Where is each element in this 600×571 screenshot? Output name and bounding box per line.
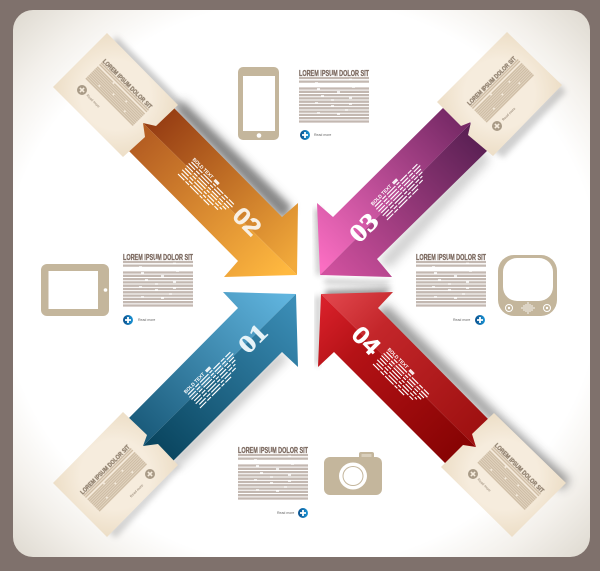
arrow 04 heading: BOLD TEXT: [386, 347, 409, 370]
number 01: 01: [233, 319, 273, 359]
arrow 03 magenta: [317, 104, 490, 277]
read more: tv: Read more: [453, 318, 470, 322]
arrow 02 lower face: [125, 123, 297, 277]
arrow 04 upper face: [321, 292, 492, 447]
text block: phone: LOREM IPSUM DOLOR SIT: [299, 69, 369, 78]
icon: tablet: [41, 264, 109, 316]
read more: camera: [277, 508, 308, 518]
arrow 02 heading: BOLD TEXT: [191, 157, 214, 180]
card 02 button: Read more: [86, 94, 101, 109]
arrow 04 red: [318, 292, 492, 467]
card 03 top right: [437, 32, 562, 156]
text block: tv: [416, 253, 486, 306]
arrow 01 label: [183, 347, 244, 408]
arrow 03 heading: BOLD TEXT: [370, 184, 393, 207]
card 02 text: LOREM IPSUM DOLOR SIT: [101, 59, 153, 111]
arrow 02 upper face: [143, 104, 298, 275]
read more: tablet: [123, 315, 155, 325]
arrow 01 lower face: [143, 294, 298, 465]
card 04 button: Read more: [477, 478, 492, 493]
text block: tablet: [123, 253, 193, 306]
text block: tv: LOREM IPSUM DOLOR SIT: [416, 253, 486, 262]
arrow 04 body text lines: [373, 348, 433, 408]
read more: tablet: Read more: [138, 318, 155, 322]
number 04: 04: [346, 321, 386, 361]
arrow and card shadows: [108, 36, 570, 538]
arrow 04 label: [373, 347, 434, 408]
arrow 02 body text lines: [178, 158, 238, 218]
card 01 button: Read more: [129, 483, 144, 498]
text block: tablet: LOREM IPSUM DOLOR SIT: [123, 253, 193, 262]
text block: camera: LOREM IPSUM DOLOR SIT: [238, 446, 308, 455]
arrow 01 body text lines: [184, 348, 244, 408]
arrow 03 left face: [317, 104, 471, 275]
card 02 top left: [53, 33, 178, 157]
text block: phone: [299, 69, 369, 122]
read more: phone: [300, 130, 331, 140]
text block: camera: [238, 446, 308, 498]
read more: phone: Read more: [314, 133, 331, 137]
icon: camera: [324, 452, 382, 495]
number 02: 02: [227, 202, 266, 242]
arrow 02 orange: [125, 104, 298, 277]
read more: tv: [453, 315, 485, 325]
arrow 01 upper face: [124, 292, 296, 446]
arrow 01 heading: BOLD TEXT: [183, 372, 206, 395]
arrow 04 lower face: [318, 294, 476, 467]
icon: smartphone: [238, 67, 279, 140]
number 03: 03: [344, 208, 384, 248]
arrow 03 label: [370, 159, 431, 220]
card 04 text: LOREM IPSUM DOLOR SIT: [493, 443, 545, 495]
card 04 bottom right: [441, 413, 566, 537]
card 03 text: LOREM IPSUM DOLOR SIT: [467, 56, 518, 107]
card 03 button: Read more: [501, 107, 516, 122]
arrow 02 label: [178, 157, 239, 218]
icon: retro tv: [498, 255, 557, 316]
arrow 03 body text lines: [371, 160, 431, 220]
read more: camera: Read more: [277, 511, 294, 515]
arrow 01 blue: [124, 292, 298, 465]
card 01 bottom left: [53, 412, 178, 537]
arrow 03 right face: [320, 123, 490, 277]
card 01 text: LOREM IPSUM DOLOR SIT: [80, 444, 132, 496]
